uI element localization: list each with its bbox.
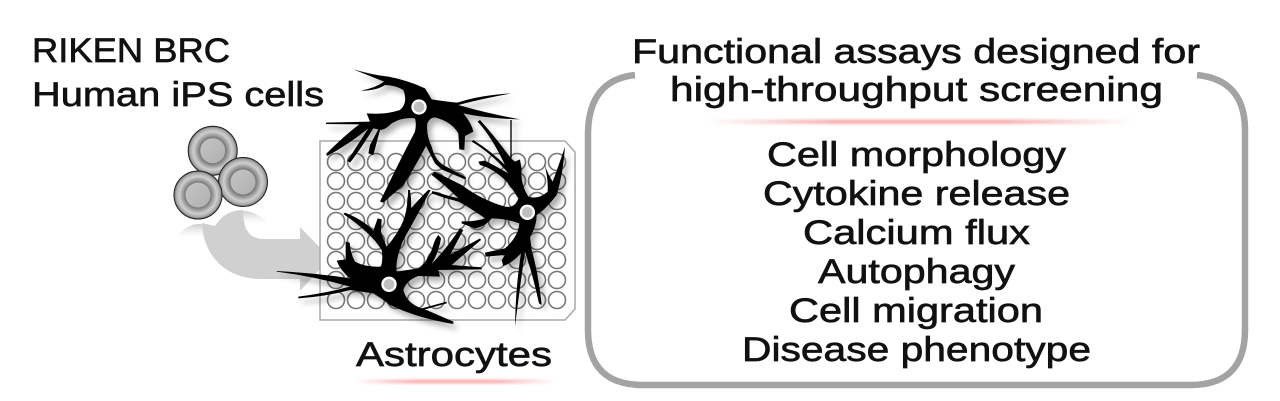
assay list	[742, 136, 1091, 369]
panel frame	[588, 75, 1245, 385]
heading underline	[708, 120, 1132, 124]
astrocyte: top	[326, 69, 520, 203]
assay list: Cell migration	[789, 292, 1043, 330]
panel: functional assays	[588, 33, 1245, 385]
icon: astrocytes	[277, 69, 565, 327]
assay list: Disease phenotype	[742, 331, 1091, 369]
label: Astrocytes: Astrocytes	[356, 336, 552, 374]
title: RIKEN BRC Human iPS cells	[32, 32, 324, 114]
title: RIKEN BRC Human iPS cells: RIKEN BRC	[32, 32, 230, 70]
icon: 96-well plate	[320, 141, 575, 320]
panel heading: high-throughput screening	[670, 71, 1163, 109]
arrow: cells to plate	[202, 210, 330, 291]
assay list: Cell morphology	[767, 136, 1066, 174]
astrocyte: bottom left	[277, 190, 482, 324]
panel heading	[632, 33, 1200, 109]
icon: iPS cell cluster	[174, 126, 268, 240]
panel heading: Functional assays designed for	[632, 33, 1200, 71]
assay list: Calcium flux	[803, 214, 1030, 252]
assay list: Autophagy	[818, 253, 1015, 291]
assay list: Cytokine release	[763, 175, 1070, 213]
label: Astrocytes	[355, 336, 555, 384]
astrocyte: right	[432, 120, 565, 327]
title: RIKEN BRC Human iPS cells: Human iPS cells	[32, 76, 324, 114]
